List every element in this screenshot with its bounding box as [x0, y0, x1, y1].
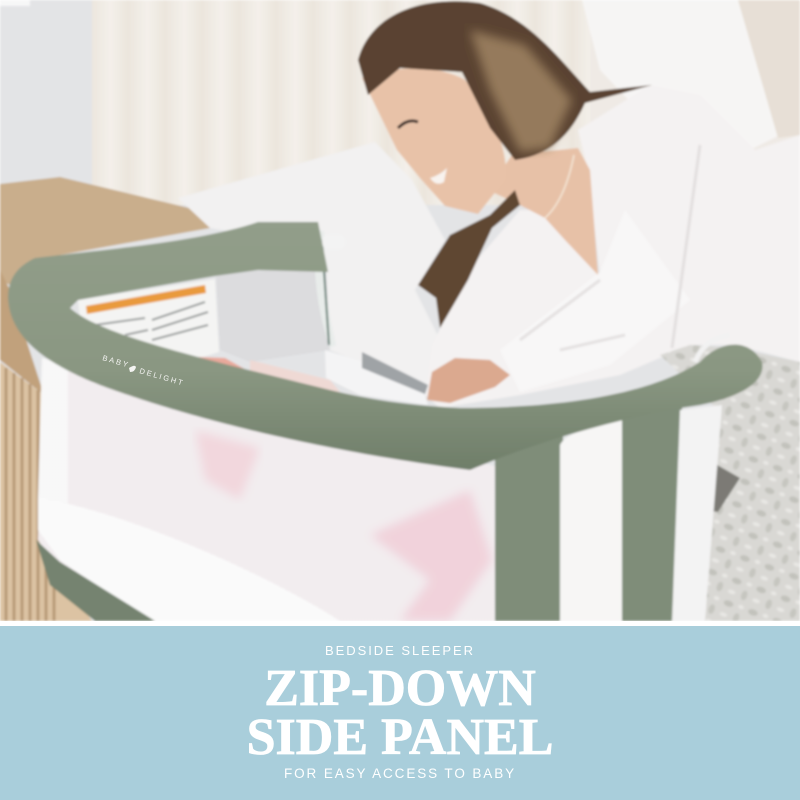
woman's falling hair	[418, 190, 520, 328]
sleeper inner mesh	[216, 268, 330, 362]
subheading: FOR EASY ACCESS TO BABY	[284, 766, 516, 781]
headline: SIDE PANEL	[247, 709, 553, 766]
mattress edge	[38, 498, 340, 621]
zipper strip and clip	[315, 228, 346, 348]
woman's neck and chest	[488, 148, 598, 275]
caption band	[0, 626, 800, 800]
photo scene	[0, 0, 800, 621]
side mesh strip	[672, 405, 722, 621]
front mesh panel	[38, 358, 495, 621]
patterned bedding	[660, 345, 800, 621]
warning label	[78, 279, 219, 358]
bed pillow	[178, 142, 445, 392]
eye	[398, 121, 418, 128]
rail clip	[695, 335, 730, 362]
logo: BABY DELIGHT	[101, 353, 186, 388]
baby hand and foot	[197, 357, 250, 385]
padded rail: far and front	[8, 222, 762, 470]
woman's face	[362, 68, 506, 214]
nightstand	[0, 177, 210, 621]
lamp corner	[0, 0, 30, 6]
woman's hand	[427, 358, 510, 403]
bedding shadow	[704, 462, 740, 512]
headline	[247, 660, 553, 766]
smile	[430, 168, 447, 184]
back pillows	[582, 0, 800, 175]
fabric side panels	[495, 400, 682, 621]
headline: ZIP-DOWN	[264, 660, 536, 717]
fabric base corner	[36, 540, 155, 621]
woman's body: white long sleeve	[425, 85, 800, 408]
wall	[0, 0, 800, 621]
logo: BABY DELIGHT: DELIGHT	[138, 366, 186, 388]
white post	[560, 418, 622, 621]
logo: BABY DELIGHT: BABY	[101, 353, 131, 370]
folded zip panel	[325, 350, 428, 405]
hair highlights	[470, 30, 572, 152]
eyebrow text: BEDSIDE SLEEPER	[325, 643, 475, 658]
necklace	[545, 155, 574, 218]
woman's hair top	[358, 1, 652, 160]
headboard	[92, 0, 800, 205]
product photo: woman leaning over bedside sleeper	[0, 0, 800, 621]
